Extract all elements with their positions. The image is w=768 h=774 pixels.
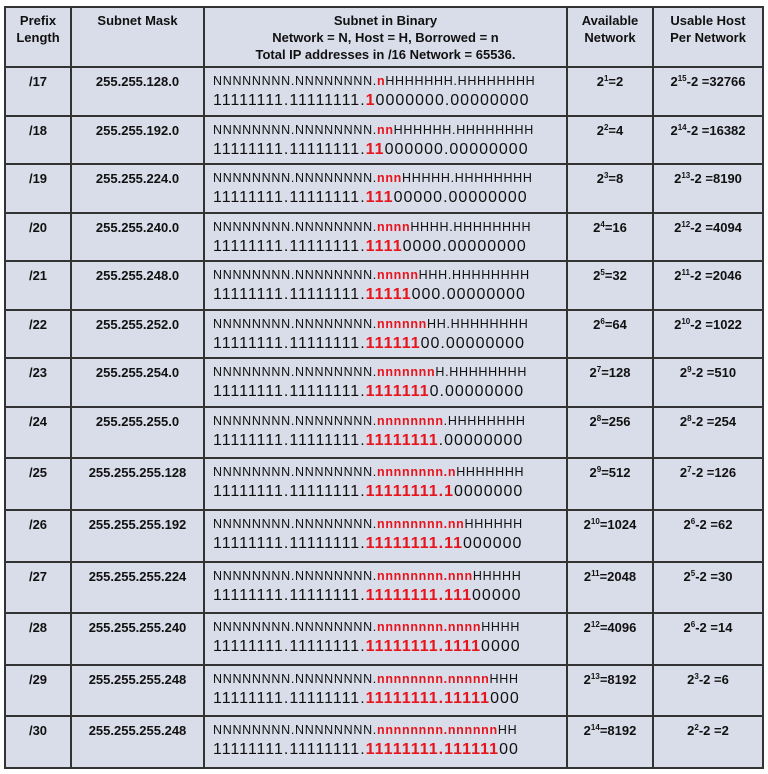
row /24: 255.255.255.0 [96,414,179,429]
row /19: NNNNNNNN.NNNNNNNN.nnnHHHHH.HHHHHHHH [213,171,533,185]
row /30: NNNNNNNN.NNNNNNNN.nnnnnnnn.nnnnnnHH [213,723,517,737]
row /22: 11111111.11111111.11111100.00000000 [213,335,525,352]
row /23: /23 [29,365,47,380]
row /21 [29,268,742,303]
row /30: /30 [29,723,47,738]
header: subnet in binary [255,13,516,62]
row /22: 26=64 [593,317,627,332]
row /24: /24 [29,414,47,429]
row /18: /18 [29,123,47,138]
row /27: /27 [29,569,47,584]
row /24 [29,414,736,449]
row /18 [29,123,746,158]
header: available network: Available [582,13,638,28]
row /17: 255.255.128.0 [96,74,179,89]
row /19: 255.255.224.0 [96,171,179,186]
row /20: 24=16 [593,220,627,235]
header: usable host: Per Network [670,30,746,45]
row /27: 25-2 =30 [684,569,732,584]
row /20: 255.255.240.0 [96,220,179,235]
row /26: 255.255.255.192 [89,517,186,532]
row /22: NNNNNNNN.NNNNNNNN.nnnnnnHH.HHHHHHHH [213,317,528,331]
row /20 [29,220,742,255]
row /20: 11111111.11111111.11110000.00000000 [213,238,527,255]
row /30: 11111111.11111111.11111111.11111100 [213,741,519,758]
header: usable host [670,13,746,45]
row /27: NNNNNNNN.NNNNNNNN.nnnnnnnn.nnnHHHHH [213,569,522,583]
row /18: 11111111.11111111.11000000.00000000 [213,141,529,158]
row /28: /28 [29,620,47,635]
row /23: 29-2 =510 [680,365,736,380]
header: prefix length [16,13,60,45]
row /29: NNNNNNNN.NNNNNNNN.nnnnnnnn.nnnnnHHH [213,672,519,686]
row /21: NNNNNNNN.NNNNNNNN.nnnnnHHH.HHHHHHHH [213,268,530,282]
row /22: /22 [29,317,47,332]
row /27 [29,569,732,604]
row /30: 255.255.255.248 [89,723,186,738]
row /25: 11111111.11111111.11111111.10000000 [213,483,523,500]
row /28: 212=4096 [584,620,636,635]
row /17: /17 [29,74,47,89]
row /30: 214=8192 [584,723,636,738]
header: available network [582,13,638,45]
row /28: 11111111.11111111.11111111.11110000 [213,638,521,655]
row /25 [29,465,736,500]
header: subnet in binary: Subnet in Binary [334,13,437,28]
row /24: 11111111.11111111.11111111.00000000 [213,432,523,449]
row /29: 11111111.11111111.11111111.11111000 [213,690,520,707]
row /29: 23-2 =6 [687,672,729,687]
row /22: 210-2 =1022 [674,317,742,332]
row /21: 255.255.248.0 [96,268,179,283]
row /19: 11111111.11111111.11100000.00000000 [213,189,528,206]
row /28 [29,620,732,655]
row /24: 28-2 =254 [680,414,736,429]
header: prefix length: Length [16,30,60,45]
row /21: /21 [29,268,47,283]
row /22 [29,317,742,352]
row /18: 255.255.192.0 [96,123,179,138]
header: subnet in binary: Total IP addresses in /16 Network = 65536. [255,47,516,62]
row /20: /20 [29,220,47,235]
row /26: 210=1024 [584,517,636,532]
row /23: NNNNNNNN.NNNNNNNN.nnnnnnnH.HHHHHHHH [213,365,527,379]
header: subnet in binary: Network = N, Host = H, Borrowed = n [272,30,499,45]
row /26: 11111111.11111111.11111111.11000000 [213,535,522,552]
row /19 [29,171,742,206]
row /17: 11111111.11111111.10000000.00000000 [213,92,529,109]
row /18: 22=4 [597,123,623,138]
row /17: 21=2 [597,74,623,89]
row /26: 26-2 =62 [684,517,732,532]
row /25: 255.255.255.128 [89,465,186,480]
row /18: NNNNNNNN.NNNNNNNN.nnHHHHHH.HHHHHHHH [213,123,534,137]
row /22: 255.255.252.0 [96,317,179,332]
row /23: 11111111.11111111.11111110.00000000 [213,383,524,400]
row /30 [29,723,729,758]
row /25: NNNNNNNN.NNNNNNNN.nnnnnnnn.nHHHHHHH [213,465,524,479]
row /25: 27-2 =126 [680,465,736,480]
row /17: 215-2 =32766 [670,74,746,89]
row /24: NNNNNNNN.NNNNNNNN.nnnnnnnn.HHHHHHHH [213,414,526,428]
row /17 [29,74,746,109]
row /28: 26-2 =14 [684,620,732,635]
row /26 [29,517,732,552]
row /21: 25=32 [593,268,627,283]
header: prefix length: Prefix [20,13,56,28]
row /28: 255.255.255.240 [89,620,186,635]
row /20: NNNNNNNN.NNNNNNNN.nnnnHHHH.HHHHHHHH [213,220,531,234]
row /30: 22-2 =2 [687,723,729,738]
row /27: 11111111.11111111.11111111.11100000 [213,587,522,604]
row /24: 28=256 [590,414,630,429]
row /19: /19 [29,171,47,186]
row /27: 255.255.255.224 [89,569,186,584]
row /25: /25 [29,465,47,480]
row /26: NNNNNNNN.NNNNNNNN.nnnnnnnn.nnHHHHHH [213,517,523,531]
row /29 [29,672,729,707]
row /21: 211-2 =2046 [674,268,742,283]
row /17: NNNNNNNN.NNNNNNNN.nHHHHHHH.HHHHHHHH [213,74,535,88]
header: available network: Network [584,30,636,45]
row /27: 211=2048 [584,569,636,584]
row /29: /29 [29,672,47,687]
row /28: NNNNNNNN.NNNNNNNN.nnnnnnnn.nnnnHHHH [213,620,520,634]
row /26: /26 [29,517,47,532]
row /29: 255.255.255.248 [89,672,186,687]
row /25: 29=512 [590,465,630,480]
row /21: 11111111.11111111.11111000.00000000 [213,286,526,303]
row /19: 213-2 =8190 [674,171,742,186]
row /20: 212-2 =4094 [674,220,742,235]
row /23: 255.255.254.0 [96,365,179,380]
row /29: 213=8192 [584,672,636,687]
header: subnet mask: Subnet Mask [97,13,178,28]
row /19: 23=8 [597,171,623,186]
row /18: 214-2 =16382 [670,123,746,138]
row /23 [29,365,736,400]
header: usable host: Usable Host [670,13,746,28]
row /23: 27=128 [590,365,630,380]
